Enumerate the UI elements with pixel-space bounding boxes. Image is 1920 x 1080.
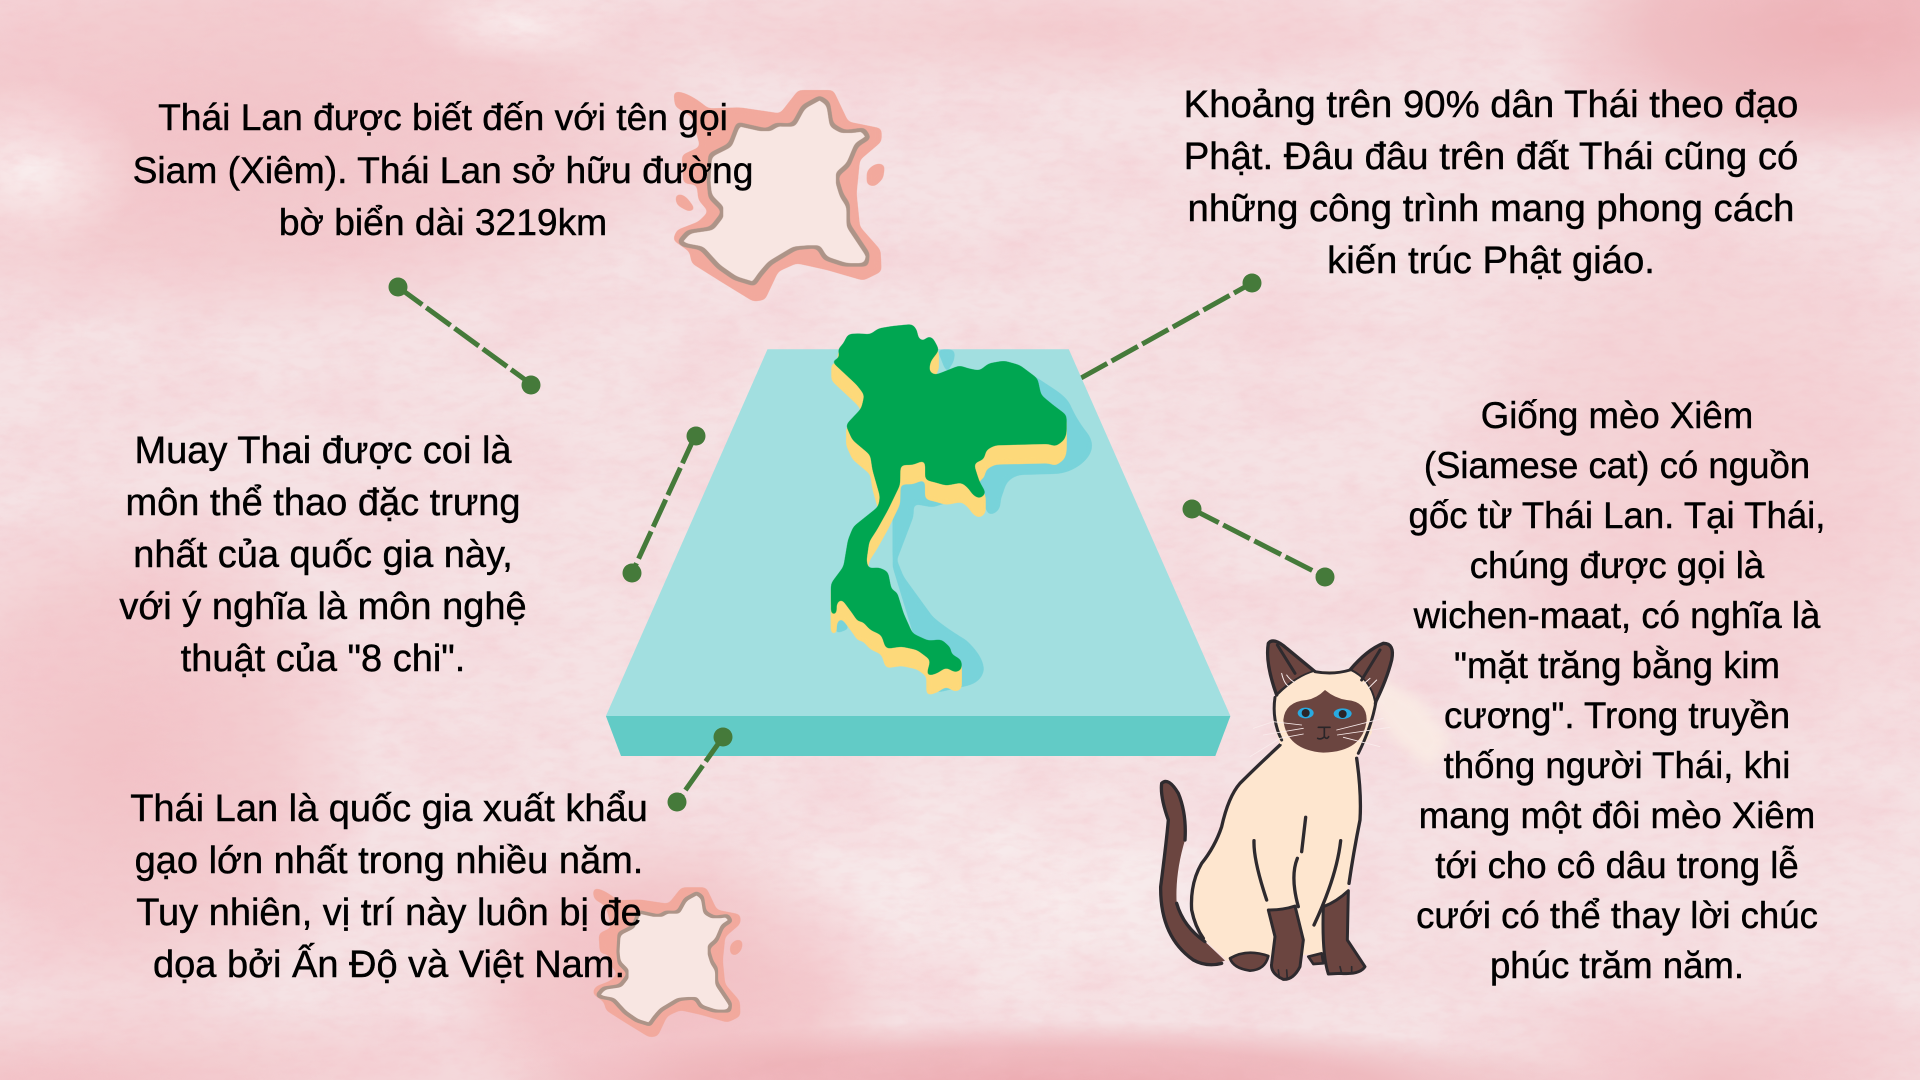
text: rice export: dọa bởi Ấn Độ và Việt Nam. <box>153 944 625 986</box>
text: Buddhism: Khoảng trên 90% dân Thái theo đạo <box>1184 83 1798 126</box>
text: Siamese cat: "mặt trăng bằng kim <box>1454 645 1780 686</box>
platform top <box>606 349 1230 716</box>
text: Siam and coastline: Thái Lan được biết đến với tên gọi <box>158 96 728 138</box>
connector: muay thai <box>622 426 706 582</box>
text: Muay Thai: với ý nghĩa là môn nghệ <box>119 586 527 628</box>
text: Siamese cat: mang một đôi mèo Xiêm <box>1419 795 1815 836</box>
text: Buddhism: kiến trúc Phật giáo. <box>1327 239 1655 282</box>
text: Muay Thai: thuật của "8 chi". <box>181 638 465 680</box>
text: Siamese cat: cương". Trong truyền <box>1444 695 1790 736</box>
text: Siamese cat: (Siamese cat) có nguồn <box>1424 445 1810 486</box>
text: rice export <box>130 788 648 986</box>
cat body <box>1191 670 1375 961</box>
cat ears <box>1268 641 1315 695</box>
map of Thailand <box>830 324 1067 677</box>
text: Muay Thai <box>119 430 527 680</box>
text: Siamese cat: thống người Thái, khi <box>1444 745 1790 786</box>
text: rice export: gạo lớn nhất trong nhiều năm. <box>135 840 643 882</box>
map extrusion <box>830 327 1067 696</box>
text: Muay Thai: Muay Thai được coi là <box>134 430 512 472</box>
text: Siam and coastline: Siam (Xiêm). Thái Lan sở hữu đường <box>133 148 753 190</box>
text: Buddhism: Phật. Đâu đâu trên đất Thái cũng có <box>1184 135 1798 178</box>
text: rice export: Thái Lan là quốc gia xuất khẩu <box>130 788 648 830</box>
text: Muay Thai: nhất của quốc gia này, <box>133 534 513 576</box>
connector: siam <box>388 278 540 394</box>
text: Siam and coastline <box>133 96 753 243</box>
text: rice export: Tuy nhiên, vị trí này luôn bị đe <box>136 892 642 934</box>
text: Siamese cat: phúc trăm năm. <box>1490 945 1744 986</box>
sea shadow <box>834 349 1092 693</box>
platform front <box>606 716 1230 756</box>
text: Muay Thai: môn thể thao đặc trưng <box>125 482 521 524</box>
text: Siamese cat: gốc từ Thái Lan. Tại Thái, <box>1409 495 1825 536</box>
text: Siamese cat: tới cho cô dâu trong lễ <box>1435 845 1799 886</box>
cat front legs <box>1268 906 1303 979</box>
text: Siamese cat: wichen-maat, có nghĩa là <box>1414 595 1820 636</box>
text: Siamese cat <box>1409 395 1825 986</box>
text: Buddhism: những công trình mang phong cách <box>1188 187 1794 230</box>
text: Buddhism <box>1184 83 1798 282</box>
connector: buddhism <box>1081 274 1262 378</box>
cat face <box>1283 690 1367 753</box>
text: Siamese cat: chúng được gọi là <box>1470 545 1764 586</box>
cat tail <box>1161 781 1225 964</box>
connector: cat <box>1182 500 1334 586</box>
text: Siamese cat: cưới có thể thay lời chúc <box>1416 895 1818 936</box>
cat paws <box>1230 953 1323 971</box>
text: Siam and coastline: bờ biển dài 3219km <box>279 201 607 243</box>
text: Siamese cat: Giống mèo Xiêm <box>1481 395 1753 436</box>
